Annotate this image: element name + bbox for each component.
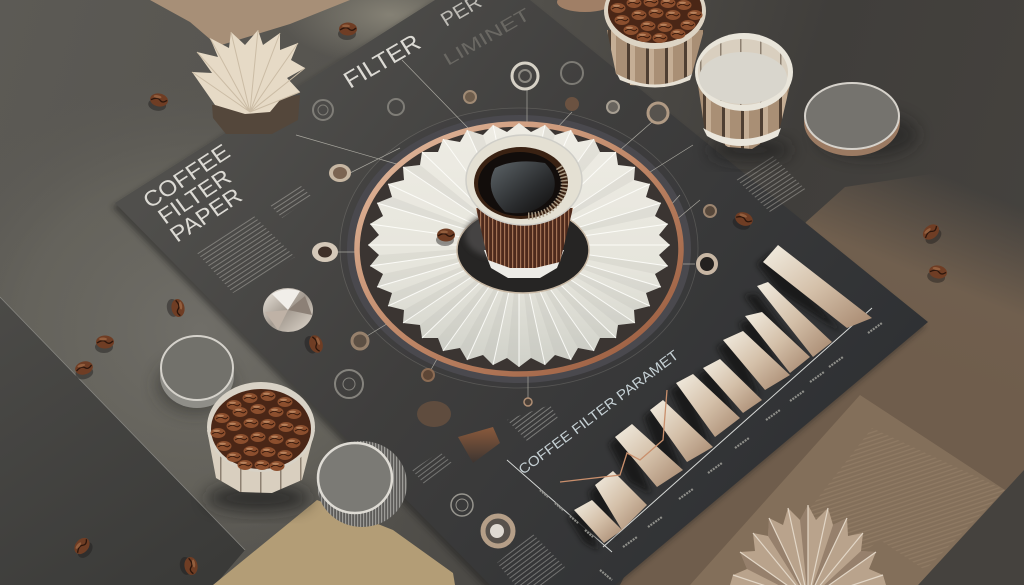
text block: right — [735, 155, 806, 212]
trend line — [560, 390, 667, 482]
metal ring right — [804, 83, 918, 157]
bar shadows — [568, 252, 841, 550]
brown paper sheet — [620, 160, 1024, 585]
image: wood sample — [417, 401, 500, 463]
bowl of beans — [206, 382, 315, 512]
small pleated filter in holder — [192, 30, 305, 134]
saucer — [457, 207, 589, 293]
dial rings around filter — [340, 108, 698, 388]
heading: coffee filter paper — [138, 139, 247, 247]
kraft paper — [213, 500, 455, 585]
chart axis labels — [540, 323, 882, 580]
metal ring left — [157, 336, 234, 413]
text block: upper left — [270, 185, 312, 218]
heading: coffee filter parameter: COFFEE FILTER PARAMET — [515, 346, 682, 477]
text block: left — [197, 215, 295, 293]
pleated filter bottom right — [730, 505, 886, 585]
metal disc — [263, 288, 313, 332]
connector lines — [296, 60, 700, 398]
poster board — [112, 0, 928, 585]
text block: lower left — [412, 452, 452, 484]
large metal ring — [317, 441, 407, 527]
text block: bottom — [497, 533, 565, 585]
faded market label: LIMINET — [440, 4, 534, 69]
heading: filter: FILTER — [339, 30, 426, 94]
icon: small dials — [313, 62, 716, 546]
coffee cup — [466, 135, 582, 278]
cup of coffee beans — [557, 0, 706, 88]
burlap paper top left — [150, 0, 350, 46]
center bean on filter — [436, 228, 455, 246]
heading: coffee filter paper: FILTER — [153, 164, 236, 229]
icon: bean dials — [312, 164, 351, 262]
bar chart — [574, 245, 872, 543]
heading: coffee filter paper: PAPER — [165, 183, 247, 247]
copper ring — [357, 124, 681, 374]
heading: coffee filter paper: COFFEE — [138, 139, 235, 213]
cup of ground powder — [695, 33, 793, 162]
textured paper sheet — [690, 395, 1005, 585]
chart axes — [507, 308, 872, 552]
text block: lower middle — [507, 405, 558, 442]
pleated paper filter — [368, 123, 670, 367]
